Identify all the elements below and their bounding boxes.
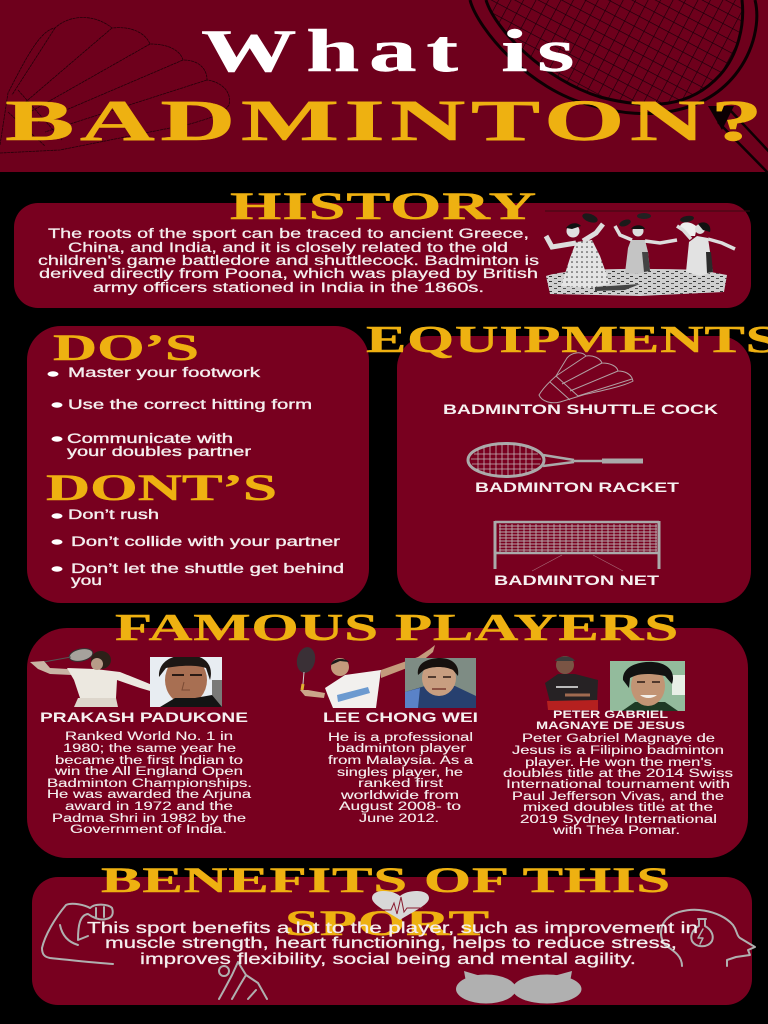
heading: dont's: DONT’S [46,468,277,509]
list: do's: Use the correct hitting form [68,397,312,412]
label: net: BADMINTON NET [494,572,660,588]
heading: benefits of this sport [101,860,671,943]
label: racket: BADMINTON RACKET [475,479,680,495]
text block: history: The roots of the sport can be traced to ancient Greece, [48,226,529,241]
text block: history: children's game battledore and shuttlecock. Badminton is [38,253,539,268]
text block: prakash bio: became the first Indian to [55,755,243,767]
text block: benefits [87,920,698,968]
text block: peter bio: player. He won the men's [525,757,712,769]
panel: famous players [27,607,748,858]
text block: peter bio: Jesus is a Filipino badminton [512,745,724,757]
list: dont's: Don’t let the shuttle get behind [71,561,344,576]
list: do's: your doubles partner [67,444,252,459]
icon: flexed arm [42,904,113,964]
text block: history: army officers stationed in India in the 1860s. [93,280,484,295]
text block: prakash bio: Badminton Championships. [47,778,252,790]
text block: prakash bio: Ranked World No. 1 in [65,731,233,743]
title: BADMINTON?: BADMINTON? [5,88,768,153]
name: peter gabriel magnaye de jesus [536,709,685,732]
icon: heart [372,891,429,920]
panel: equipments [366,319,768,603]
text block: lee bio: June 2012. [359,813,439,825]
text block: peter bio: with Thea Pomar. [552,825,680,837]
icon: shuttle cock [539,353,633,403]
text block: lee bio: August 2008- to [339,801,461,813]
figure: peter action [545,656,598,710]
text block: lee bio: He is a professional [328,732,473,744]
icon: flexibility figure [219,962,267,999]
text block: lee bio: ranked first [358,778,444,790]
text block: prakash bio: 1980; the same year he [63,743,236,755]
text block: peter bio [503,733,733,837]
heading: history: HISTORY [230,185,537,228]
heading: benefits of this sport: BENEFITS OF THIS [101,860,671,900]
text block: benefits: improves flexibility, social being and mental agility. [140,951,636,968]
icon: net [495,521,659,571]
player: peter gabriel magnaye de jesus [503,656,733,837]
list: dont's [52,507,344,588]
icon: racket outline [470,0,768,180]
list: dont's: Don’t collide with your partner [71,534,341,549]
icon: head with flask [661,910,755,966]
panel: dos and donts [27,326,369,603]
photo: peter portrait [610,661,685,711]
text block: prakash bio: Government of India. [70,824,227,836]
text block: lee bio [328,732,474,825]
name: prakash padukone: PRAKASH PADUKONE [40,709,248,725]
heading: famous players: FAMOUS PLAYERS [115,607,679,649]
icon: shuttlecock outline [0,18,230,153]
text block: lee bio: badminton player [336,743,466,755]
figure: lee action [294,645,435,708]
name: lee chong wei: LEE CHONG WEI [323,709,478,725]
panel: history [14,185,751,308]
label: shuttle cock: BADMINTON SHUTTLE COCK [443,401,718,417]
figure: prakash action [30,647,176,707]
text block: peter bio: Paul Jefferson Vivas, and the [512,791,724,803]
list: do's: Master your footwork [68,365,260,380]
title: What is: What is [201,18,584,84]
text block: peter bio: mixed doubles title at the [523,802,713,814]
text block: peter bio: 2019 Sydney International [520,814,717,826]
text block: history: China, and India, and it is closely related to the old [68,240,508,255]
list: do's [48,365,312,459]
text block: history [38,226,539,295]
text block: peter bio: International tournament with [506,779,730,791]
text block: lee bio: from Malaysia. As a [328,755,474,767]
text block: peter bio: doubles title at the 2014 Swiss [503,768,733,780]
text block: prakash bio: He was awarded the Arjuna [47,789,252,801]
photo: lee portrait [405,658,476,708]
name: peter gabriel magnaye de jesus: PETER GABRIEL [553,709,668,721]
text block: lee bio: worldwide from [339,790,459,802]
photo: prakash portrait [150,655,222,707]
list: do's: Communicate with [67,431,233,446]
text block: prakash bio: win the All England Open [54,766,243,778]
player: lee chong wei [294,645,478,825]
text block: prakash bio: Padma Shri in 1982 by the [52,813,246,825]
heading: do's: DO’S [53,328,199,369]
list: dont's: Don’t rush [68,507,159,522]
header banner [0,0,768,180]
player: prakash padukone [30,647,252,836]
text block: peter bio: Peter Gabriel Magnaye de [522,733,715,745]
list: dont's: you [71,573,102,588]
icon: racket [468,444,643,476]
image: battledore engraving [545,211,750,296]
text block: benefits: muscle strength, heart functioning, helps to reduce stress, [105,935,677,952]
text block: prakash bio [47,731,252,836]
panel: benefits [32,860,755,1005]
heading: equipments: EQUIPMENTS [366,319,768,361]
text block: lee bio: singles player, he [337,767,463,779]
heading: benefits of this sport: SPORT [285,903,490,943]
name: peter gabriel magnaye de jesus: MAGNAYE DE JESUS [536,720,685,732]
icon: speech bubbles [456,971,582,1004]
text block: benefits: This sport benefits a lot to the player, such as improvement in [87,920,698,937]
text block: history: derived directly from Poona, which was played by British [39,266,538,281]
text block: prakash bio: award in 1972 and the [65,801,233,813]
